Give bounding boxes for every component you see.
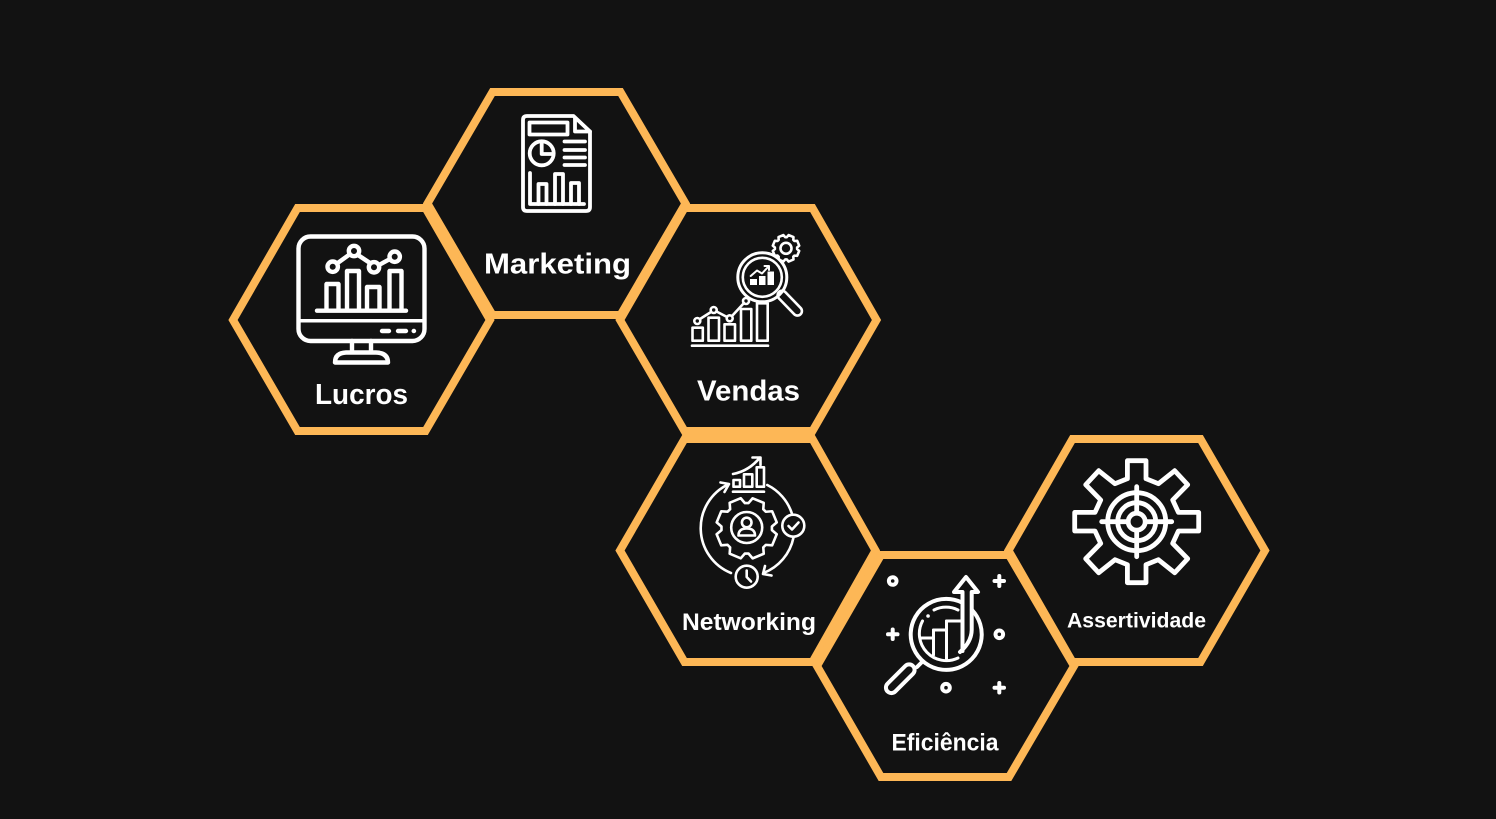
icon: magnifier with rising arrow bbox=[884, 576, 1004, 695]
panel: Marketing bbox=[428, 92, 686, 315]
panel: Assertividade bbox=[1008, 439, 1265, 662]
icon: gear with target bbox=[1075, 461, 1199, 583]
icon: monitor with chart bbox=[298, 236, 424, 362]
icon: magnifier with sales chart and gear bbox=[692, 231, 804, 346]
panel: Eficiência bbox=[817, 555, 1074, 777]
icon: gear with person, growth cycle bbox=[701, 458, 804, 588]
label: Vendas: Vendas bbox=[697, 376, 800, 408]
panel: Vendas bbox=[620, 208, 876, 431]
label: Assertividade: Assertividade bbox=[1067, 610, 1206, 633]
label: Networking: Networking bbox=[682, 609, 816, 636]
label: Eficiência: Eficiência bbox=[892, 730, 999, 756]
label: Marketing: Marketing bbox=[484, 248, 631, 280]
icon: report document bbox=[523, 116, 590, 211]
panel: Networking bbox=[620, 439, 876, 662]
panel: Lucros bbox=[233, 208, 490, 431]
label: Lucros: Lucros bbox=[315, 379, 408, 411]
